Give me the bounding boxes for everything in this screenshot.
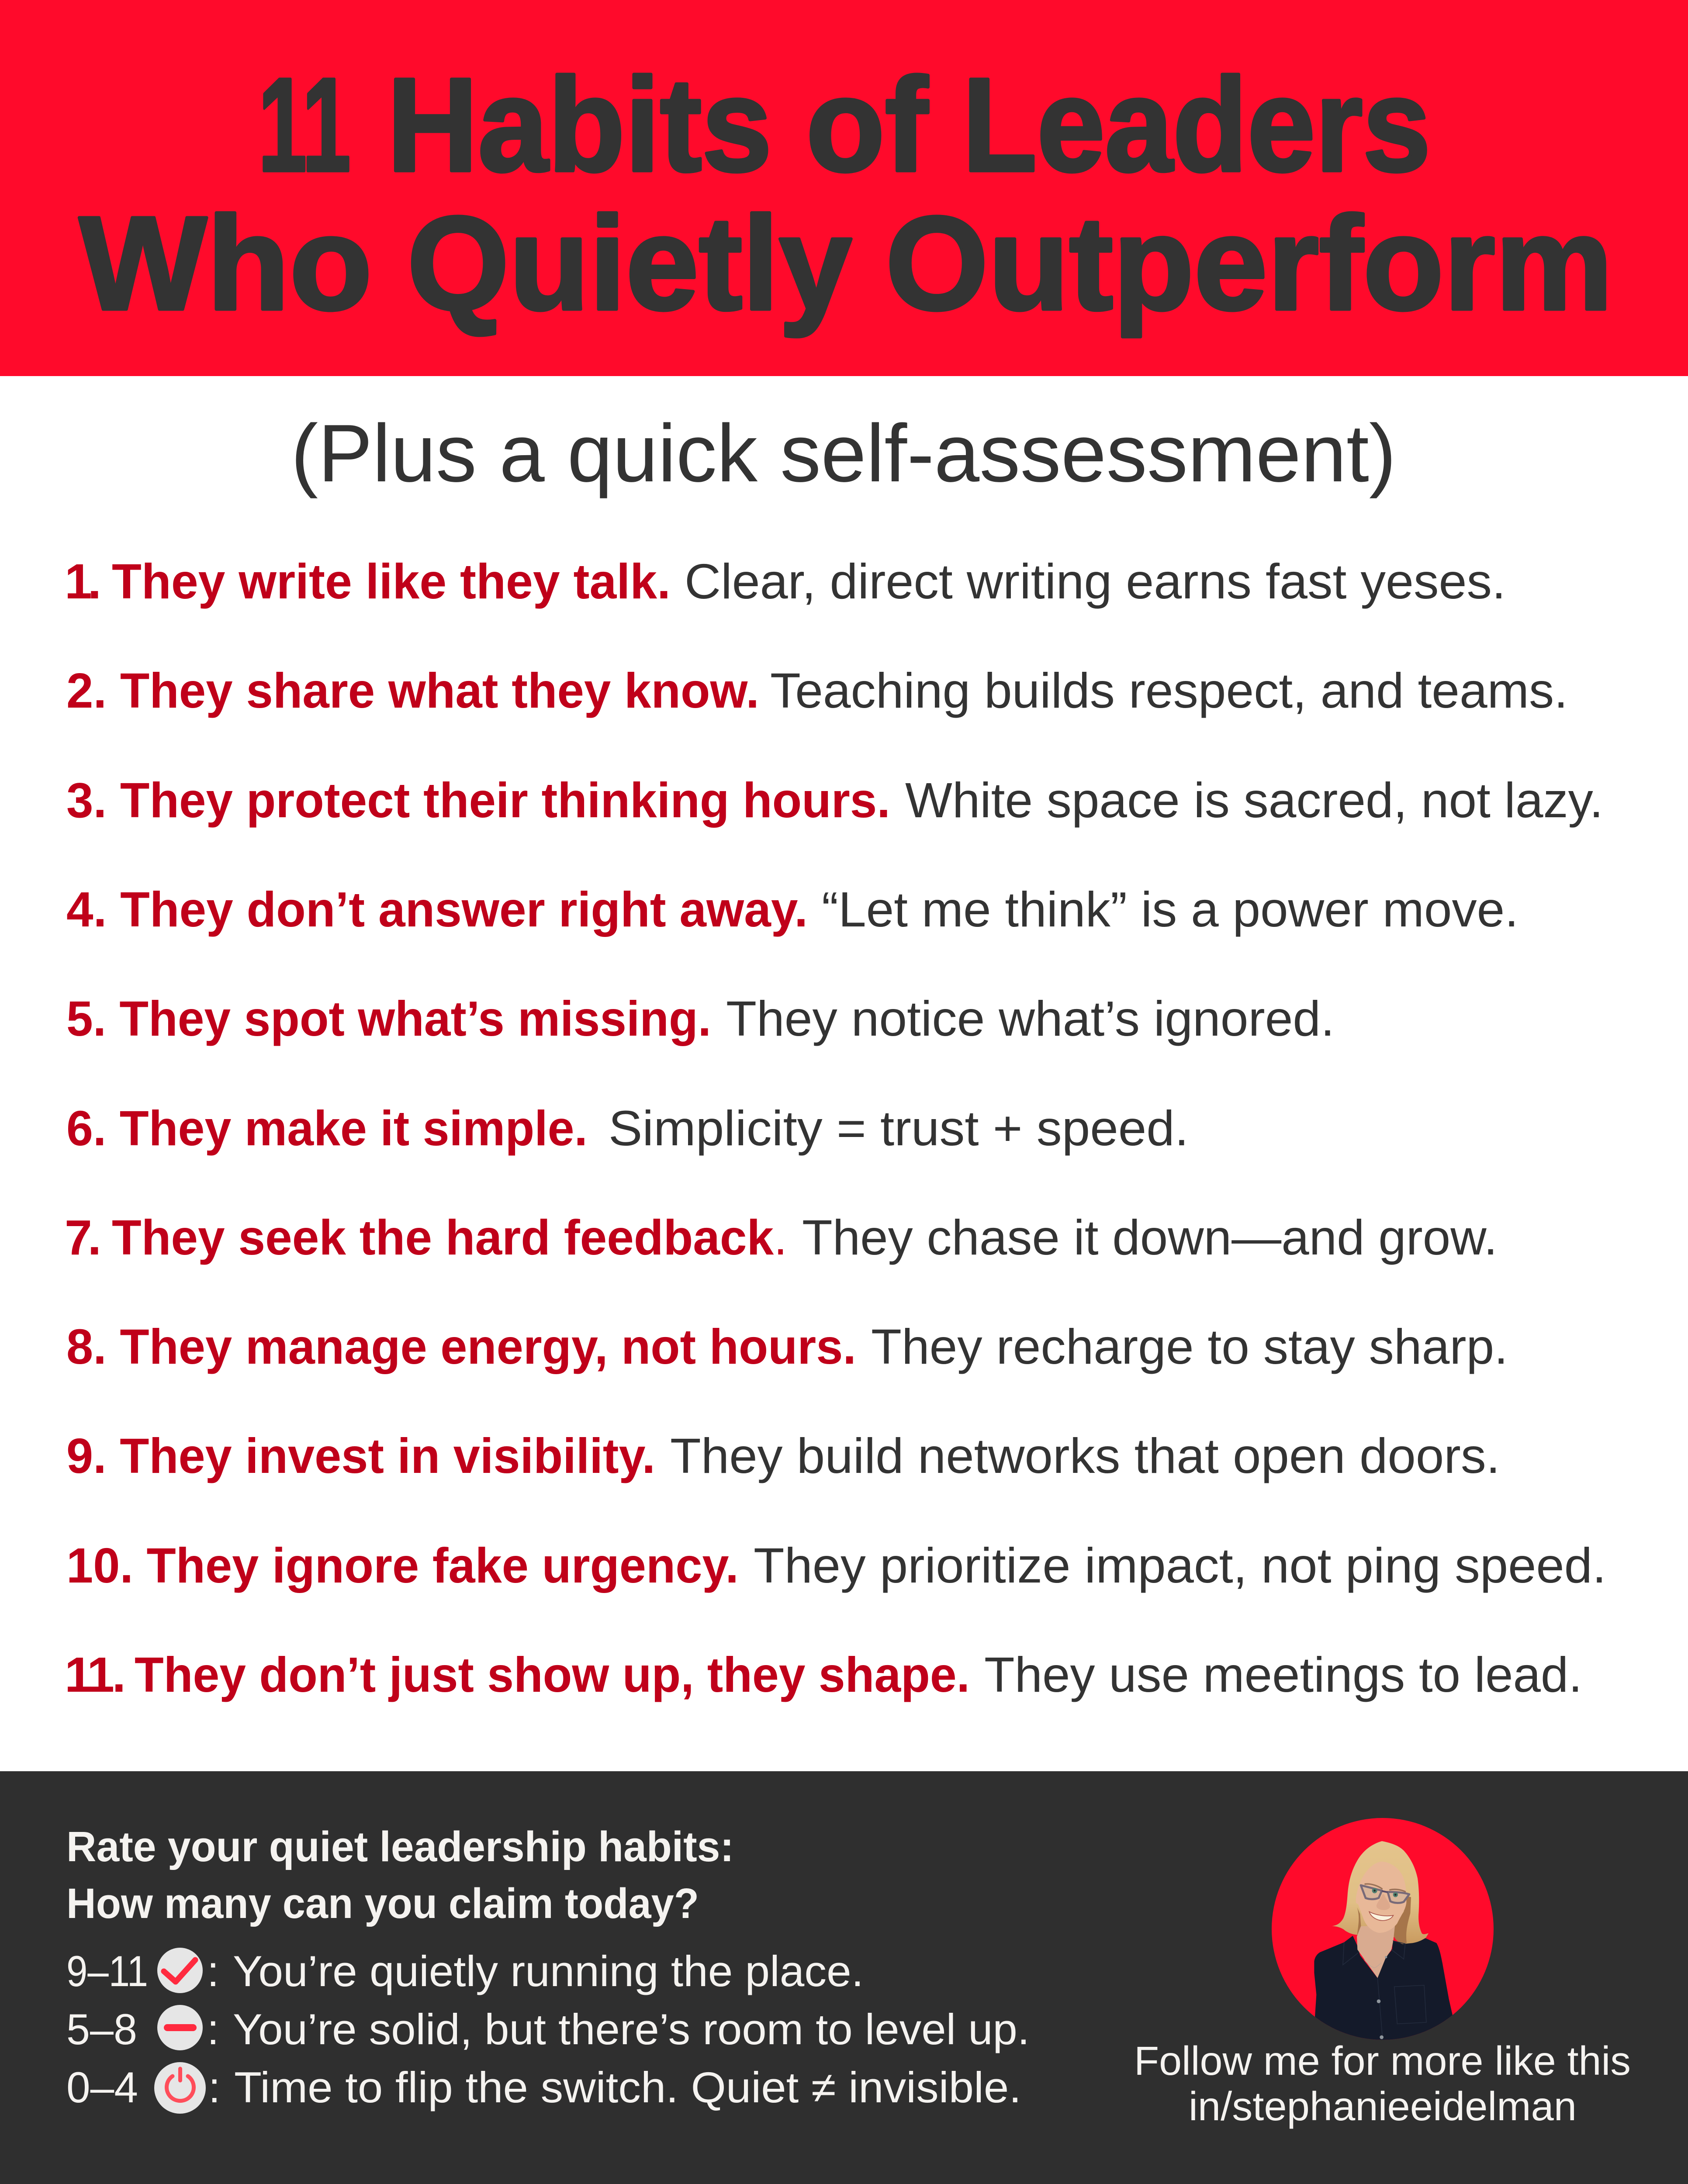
title line 2: Quietly xyxy=(407,189,853,339)
shirt buttons xyxy=(1377,1956,1387,2039)
habit 5 xyxy=(66,991,1335,1046)
habit 1 xyxy=(65,554,1506,609)
self-assessment block xyxy=(66,1823,1030,2114)
hair xyxy=(1332,1841,1429,1944)
icon: check mark xyxy=(157,1948,203,1993)
habit 10: 10. They ignore fake urgency. xyxy=(66,1538,739,1593)
habit 9 xyxy=(66,1428,1500,1483)
habit 4 xyxy=(66,882,1519,937)
glasses xyxy=(1361,1885,1409,1903)
habit 2 xyxy=(66,663,1568,718)
habit 2: 2. They share what they know. xyxy=(66,663,759,718)
follow text xyxy=(1134,2038,1631,2129)
habit 7: They seek the hard feedback. xyxy=(112,1210,787,1265)
collar and pocket seams xyxy=(1343,1941,1426,2040)
follow text: Follow me for more like this xyxy=(1134,2038,1631,2084)
habit 11: They use meetings to lead. xyxy=(984,1647,1582,1702)
habit 1: They write like they talk. xyxy=(112,554,671,609)
title line 1: Leaders xyxy=(962,50,1431,199)
smile xyxy=(1369,1912,1393,1921)
footer band xyxy=(0,1771,1688,2184)
score row 0-4: 0–4 xyxy=(66,2063,138,2111)
habit 10: They prioritize impact, not ping speed. xyxy=(754,1538,1606,1593)
title line 1: 11 xyxy=(258,50,351,199)
score row 9-11: You’re quietly running the place. xyxy=(233,1947,864,1995)
score row 0-4: Time to flip the switch. Quiet ≠ invisible. xyxy=(234,2063,1021,2111)
habit 7: 7. xyxy=(65,1210,101,1265)
habit 6: 6. They make it simple. xyxy=(66,1101,588,1156)
title line 2: Who xyxy=(79,189,372,338)
icon: power xyxy=(154,2062,206,2114)
icon: minus xyxy=(157,2005,203,2050)
habit 7 xyxy=(65,1210,1498,1265)
score row 5-8: 5–8 xyxy=(66,2005,137,2053)
score row 9-11: 9–11 xyxy=(66,1947,148,1995)
habit 8: 8. They manage energy, not hours. xyxy=(66,1319,856,1374)
habit 3: White space is sacred, not lazy. xyxy=(905,773,1603,828)
title line 2 xyxy=(79,189,1613,339)
score row 5-8: : xyxy=(207,2005,219,2053)
habit 4: 4. They don’t answer right away. xyxy=(66,882,808,937)
title line 1 xyxy=(258,50,1431,199)
title xyxy=(79,50,1613,339)
self-assessment heading: How many can you claim today? xyxy=(66,1880,699,1927)
subtitle: (Plus a quick self-assessment) xyxy=(291,408,1396,499)
self-assessment heading: Rate your quiet leadership habits: xyxy=(66,1823,734,1870)
habit 4: “Let me think” is a power move. xyxy=(822,882,1519,937)
habit 11: 11. xyxy=(65,1647,126,1702)
habit 8: They recharge to stay sharp. xyxy=(871,1319,1508,1374)
habit 8 xyxy=(66,1319,1508,1374)
habit 1: Clear, direct writing earns fast yeses. xyxy=(685,554,1506,609)
portrait xyxy=(1272,1818,1494,2041)
score row 9-11: : xyxy=(207,1947,219,1995)
habit 11 xyxy=(65,1647,1582,1702)
habit 11: They don’t just show up, they shape. xyxy=(135,1647,970,1702)
brows and nose xyxy=(1365,1884,1405,1892)
follow text: in/stephanieeidelman xyxy=(1189,2084,1577,2129)
habit 9: 9. They invest in visibility. xyxy=(66,1428,655,1483)
habit 5: 5. They spot what’s missing. xyxy=(66,991,711,1046)
face xyxy=(1356,1862,1406,1933)
habit 6 xyxy=(66,1101,1189,1156)
habit 3 xyxy=(66,773,1603,828)
habits list xyxy=(65,554,1606,1702)
header band xyxy=(0,0,1688,376)
habit 10 xyxy=(66,1538,1606,1593)
habit 2: Teaching builds respect, and teams. xyxy=(770,663,1568,718)
shirt xyxy=(1314,1936,1453,2041)
habit 3: 3. They protect their thinking hours. xyxy=(66,773,890,828)
title line 2: Outperform xyxy=(886,189,1613,339)
self-assessment heading xyxy=(66,1823,734,1927)
title line 1: of xyxy=(806,50,929,199)
score row 0-4: : xyxy=(208,2063,221,2111)
title line 1: Habits xyxy=(387,50,772,199)
habit 7: They chase it down—and grow. xyxy=(802,1210,1498,1265)
neck xyxy=(1357,1925,1395,1978)
habit 9: They build networks that open doors. xyxy=(670,1428,1500,1483)
hair shadow xyxy=(1394,1896,1411,1944)
score row 5-8: You’re solid, but there’s room to level up. xyxy=(233,2005,1030,2053)
necklace xyxy=(1364,1960,1381,1968)
habit 5: They notice what’s ignored. xyxy=(726,991,1335,1046)
habit 6: Simplicity = trust + speed. xyxy=(609,1101,1189,1156)
habit 1: 1. xyxy=(65,554,101,609)
